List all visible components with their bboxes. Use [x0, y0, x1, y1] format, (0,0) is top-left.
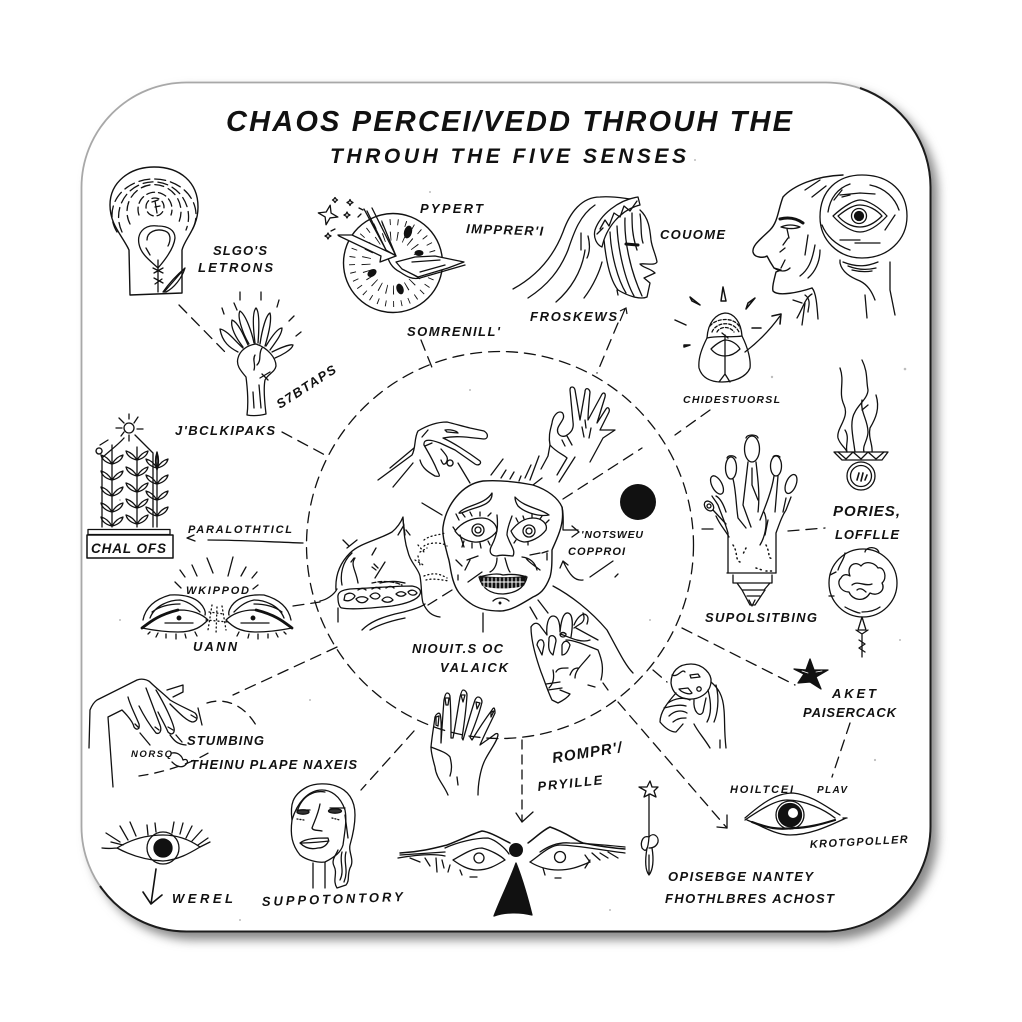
label: NORSQ: NORSQ — [131, 749, 173, 760]
icon: hand holding ball — [653, 664, 726, 748]
icon: hand top-left in circle — [378, 422, 487, 487]
label: ROMPR'/: ROMPR'/ — [551, 739, 625, 767]
label: J'BCLKIPAKS: J'BCLKIPAKS — [175, 423, 275, 438]
icon: disk with clock hands — [316, 198, 465, 312]
label: PORIES,: PORIES, — [833, 503, 900, 520]
icon: reaching hand left — [89, 679, 202, 787]
label: SUPOLSITBING: SUPOLSITBING — [705, 610, 817, 625]
label: IMPPRER'I: IMPPRER'I — [466, 221, 544, 239]
label: PLAV: PLAV — [817, 785, 848, 796]
label: SUPPOTONTORY: SUPPOTONTORY — [262, 889, 404, 909]
small arrow after FROSKEWS — [620, 308, 627, 321]
label: UANN: UANN — [193, 639, 238, 654]
icon: lower left eye with lashes — [102, 822, 210, 864]
black dot — [620, 484, 656, 520]
label: PARALOTHTICL: PARALOTHTICL — [188, 524, 292, 536]
label: LETRONS: LETRONS — [198, 260, 273, 275]
label: 'NOTSWEU: 'NOTSWEU — [581, 529, 643, 541]
icon: teardrop shape with slab — [320, 517, 449, 630]
icon: hand under face — [531, 613, 608, 703]
illustrations — [87, 167, 907, 916]
label: CHIDESTUORSL: CHIDESTUORSL — [683, 394, 780, 406]
icon: woman with tiara — [513, 197, 657, 302]
label: KROTGPOLLER: KROTGPOLLER — [810, 834, 908, 851]
label: STUMBING: STUMBING — [187, 733, 264, 748]
arrow down to central eyes — [516, 740, 533, 822]
label: LOFFLLE: LOFFLLE — [835, 527, 899, 542]
icon: smoke and button — [834, 360, 888, 490]
label: COUOME: COUOME — [660, 227, 725, 242]
icon: down arrow beside eye — [143, 869, 162, 904]
label: HOILTCEI: HOILTCEI — [730, 784, 794, 796]
label: PYPERT: PYPERT — [420, 201, 484, 216]
icon: lower right eye — [745, 793, 847, 835]
label: THEINU PLAPE NAXEIS: THEINU PLAPE NAXEIS — [190, 757, 357, 772]
icon: bulbous finger hand — [702, 435, 799, 606]
subtitle: THROUH THE FIVE SENSES — [330, 145, 686, 168]
label: PRYILLE: PRYILLE — [537, 772, 603, 794]
label: FROSKEWS: FROSKEWS — [530, 309, 617, 324]
icon: black star — [794, 659, 828, 689]
title: CHAOS PERCEI/VEDD THROUH THE — [226, 106, 794, 138]
arrow to lower right eye — [618, 702, 727, 828]
coaster background — [82, 82, 938, 940]
label: SOMRENILL': SOMRENILL' — [407, 324, 501, 339]
dashed connector lines — [139, 305, 850, 790]
icon: bulb head — [110, 167, 198, 295]
label: NIOUIT.S OC: NIOUIT.S OC — [412, 641, 504, 656]
icon: plants with sun — [87, 414, 173, 558]
icon: open hand bottom — [431, 690, 498, 795]
icon: globe with brain cloud — [829, 548, 897, 657]
icon: hand top-right in circle — [541, 387, 615, 482]
arrow to plant box — [187, 535, 303, 543]
icon: central face — [443, 481, 563, 611]
icon: woman portrait — [291, 784, 355, 888]
label: VALAICK: VALAICK — [440, 660, 510, 675]
dashed central circle — [306, 352, 694, 738]
icon: sprouting hand stalk — [220, 292, 301, 416]
label: OPISEBGE NANTEY: OPISEBGE NANTEY — [668, 869, 814, 884]
label: AKET: AKET — [831, 686, 877, 701]
label: S7BTAPS: S7BTAPS — [273, 362, 339, 412]
icon: central eyes with dot and triangle — [398, 827, 625, 916]
icon: man profile with eye — [753, 175, 907, 325]
label: PAISERCACK: PAISERCACK — [803, 705, 898, 720]
label: WEREL: WEREL — [172, 891, 233, 906]
label: WKIPPOD: WKIPPOD — [186, 585, 249, 597]
label: FHOTHLBRES ACHOST: FHOTHLBRES ACHOST — [665, 891, 835, 906]
lines around central face — [422, 456, 633, 673]
icon: small head with rays and arrow — [675, 287, 781, 382]
icon: pair of eyes — [142, 557, 292, 639]
label: COPPROI: COPPROI — [568, 546, 626, 558]
icon: wand with star and bud — [639, 781, 658, 875]
label: CHAL OFS: CHAL OFS — [91, 541, 166, 556]
label: SLGO'S: SLGO'S — [213, 243, 267, 258]
